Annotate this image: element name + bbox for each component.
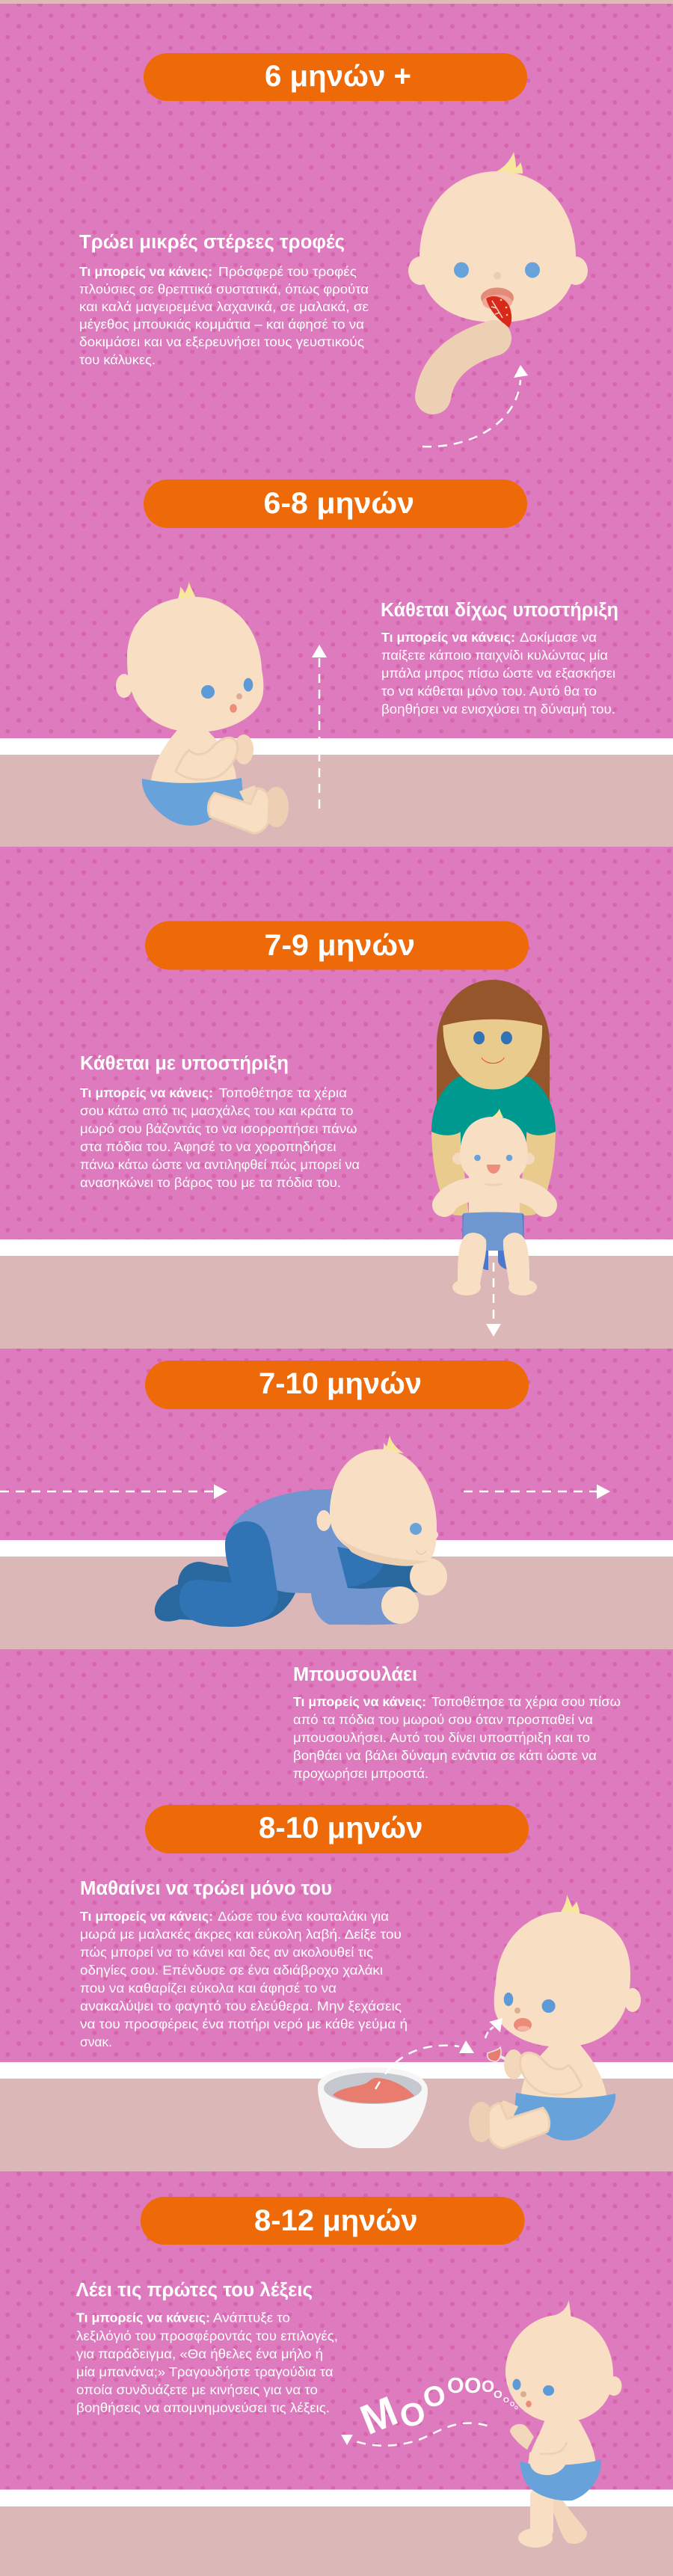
text block: advice for sitting with support: ανασηκώνει το βάρος του με τα πόδια του. — [80, 1175, 341, 1190]
text block: advice for self feeding: οδηγίες σου. Επένδυσε σε ένα αδιάβροχο χαλάκι — [80, 1963, 383, 1978]
age pill: 7-10 months: 7-10 μηνών — [259, 1367, 422, 1400]
text block: advice for sitting with support — [80, 1085, 360, 1190]
text block: advice for sitting with support: σου κάτω από τις μασχάλες του και κράτα το — [80, 1103, 353, 1118]
heading: sits with support: Κάθεται με υποστήριξη — [80, 1053, 289, 1074]
arrow: dashed arrow right ahead of baby — [464, 1484, 610, 1499]
text block: advice for first words: μία μπανάνα;» Τραγουδήστε τραγούδια τα — [76, 2364, 334, 2379]
floor — [0, 2489, 673, 2576]
text block: advice for sitting without support: παίξετε κάποιο παιχνίδι κυλώντας μία — [381, 648, 608, 663]
text block: advice for crawling — [293, 1694, 621, 1781]
arrow: dashed arrow down — [486, 1263, 501, 1337]
text block: advice for self feeding: πώς μπορεί να το κάνει και δες αν ακολουθεί τις — [80, 1945, 373, 1960]
illustration: crawling baby — [155, 1435, 447, 1627]
age pill: 7-9 months — [145, 921, 529, 969]
illustration: bowl of food — [318, 2067, 428, 2148]
illustration: mother holding baby — [431, 980, 556, 1295]
text block: advice for sitting without support: Δοκίμασε να — [520, 630, 597, 645]
text block: advice for solid foods: και καλά μαγειρεμένα λαχανικά, σε μαλακά, σε — [79, 299, 369, 314]
heading: crawls: Μπουσουλάει — [293, 1664, 417, 1685]
text block: advice for first words — [76, 2310, 338, 2415]
arrow: dashed arrow right behind baby — [0, 1484, 227, 1499]
text block: advice for solid foods: μέγεθος μπουκιάς κομμάτια – και άφησέ το να — [79, 317, 364, 332]
callout: MOOO speech letters: O — [447, 2374, 464, 2398]
panel: 8-12 months — [0, 2197, 673, 2576]
arrow: dashed arrow up — [312, 645, 327, 809]
age pill: 6 months plus: 6 μηνών + — [265, 60, 411, 93]
text block: advice for self feeding — [80, 1909, 408, 2049]
text block: advice for self feeding: σνακ. — [80, 2034, 112, 2049]
age pill: 6-8 months — [144, 479, 527, 528]
callout: MOOO speech letters: O — [482, 2377, 494, 2396]
age pill: 8-12 months: 8-12 μηνών — [254, 2204, 417, 2237]
floor — [0, 1239, 673, 1349]
heading: learns to feed himself: Μαθαίνει να τρώει μόνο του — [80, 1878, 332, 1899]
callout: MOOO speech letters — [354, 2374, 518, 2444]
illustration: baby eating strawberry — [408, 152, 588, 396]
illustration: baby with spoon — [469, 1895, 641, 2148]
text block: advice for first words: Ανάπτυξε το — [213, 2310, 290, 2325]
panel: 6 months plus — [79, 53, 588, 447]
age pill: 8-12 months — [141, 2197, 525, 2245]
callout: MOOO speech letters: O — [510, 2401, 514, 2408]
text block: advice for first words: βοηθήσεις να απομνημονεύσει τις λέξεις. — [76, 2400, 330, 2415]
text block: advice for solid foods: πλούσιες σε θρεπτικά συστατικά, όπως φρούτα — [79, 281, 369, 296]
text block: advice for sitting without support: βοηθήσει να ενισχύσει τη δύναμή του. — [381, 702, 615, 717]
text block: advice for sitting with support: Τι μπορείς να κάνεις: — [80, 1085, 213, 1100]
text block: advice for self feeding: ανακαλύψει το φαγητό του ελεύθερα. Μην ξεχάσεις — [80, 1999, 402, 2014]
callout: MOOO speech letters: O — [503, 2396, 509, 2405]
text block: advice for sitting with support: μωρό σου βάζοντάς το να ισορροπήσει πάνω — [80, 1121, 357, 1136]
callout: MOOO speech letters: O — [396, 2394, 429, 2435]
age pill: 8-10 months — [145, 1805, 529, 1853]
text block: advice for crawling: Τι μπορείς να κάνεις: — [293, 1694, 426, 1709]
text block: advice for crawling: από τα πόδια του μωρού σου όταν προσπαθεί να — [293, 1712, 593, 1727]
text block: advice for self feeding: να του προσφέρεις ένα ποτήρι νερό με κάθε γεύμα ή — [80, 2017, 408, 2031]
callout: MOOO speech letters: O — [494, 2388, 503, 2401]
age pill: 8-10 months: 8-10 μηνών — [259, 1812, 423, 1844]
text block: advice for sitting with support: Τοποθέτησε τα χέρια — [219, 1085, 347, 1100]
text block: advice for solid foods: Τι μπορείς να κάνεις: — [79, 264, 212, 279]
panel: 7-10 months — [0, 1361, 673, 1781]
callout: MOOO speech letters: O — [420, 2379, 449, 2415]
text block: advice for crawling: μπουσουλήσει. Αυτό του δίνει υποστήριξη και το — [293, 1730, 590, 1745]
text block: advice for solid foods — [79, 264, 369, 367]
text block: advice for first words: Τι μπορείς να κάνεις: — [76, 2310, 210, 2325]
text block: advice for self feeding: που να καθαρίζει εύκολα και άφησέ το να — [80, 1981, 336, 1996]
floor — [0, 2062, 673, 2171]
arrow: dashed arc from spoon to mouth — [485, 2018, 503, 2038]
text block: advice for sitting without support: Τι μπορείς να κάνεις: — [381, 630, 515, 645]
text block: advice for first words: λεξιλόγιό του προσφέροντάς του επιλογές, — [76, 2328, 338, 2343]
arrow: curved dashed arrow up — [422, 365, 528, 447]
age pill: 6 months plus — [144, 53, 527, 101]
text block: advice for sitting without support: μπάλα μπρος πίσω ώστε να εξασκήσει — [381, 666, 615, 681]
text block: advice for self feeding: μωρά με μαλακές άκρες και εύκολη λαβή. Δείξε του — [80, 1927, 402, 1942]
age pill: 6-8 months: 6-8 μηνών — [263, 487, 414, 520]
text block: advice for self feeding: Τι μπορείς να κάνεις: — [80, 1909, 213, 1924]
arrow: dashed curve to the left — [341, 2423, 488, 2446]
text block: advice for solid foods: του κάλυκες. — [79, 352, 156, 367]
heading: eats small solid foods: Τρώει μικρές στέρεες τροφές — [79, 232, 345, 253]
text block: advice for sitting with support: πάνω κάτω ώστε να αντιληφθεί πώς μπορεί να — [80, 1157, 360, 1172]
text block: advice for crawling: Τοποθέτησε τα χέρια σου πίσω — [431, 1694, 621, 1709]
illustration: baby sitting — [116, 582, 289, 833]
callout: MOOO speech letters: M — [354, 2387, 404, 2444]
heading: says first words: Λέει τις πρώτες του λέξεις — [76, 2280, 313, 2301]
age pill: 7-9 months: 7-9 μηνών — [265, 929, 415, 962]
panel: 6-8 months — [0, 479, 673, 847]
callout: MOOO speech letters: O — [514, 2406, 518, 2411]
text block: advice for first words: για παράδειγμα, «Θα ήθελες ένα μήλο ή — [76, 2346, 323, 2361]
text block: advice for crawling: βοηθάει να βάλει δύναμη ενάντια σε κάτι ώστε να — [293, 1748, 597, 1763]
text block: advice for crawling: προχωρήσει μπροστά. — [293, 1766, 428, 1781]
illustration: standing baby talking — [505, 2300, 622, 2548]
text block: advice for solid foods: Πρόσφερέ του τροφές — [218, 264, 357, 279]
text block: advice for self feeding: Δώσε του ένα κουταλάκι για — [218, 1909, 389, 1924]
callout: MOOO speech letters: O — [464, 2374, 482, 2398]
text block: advice for sitting without support: το να κάθεται μόνο του. Αυτό θα το — [381, 684, 597, 699]
panel: 7-9 months — [0, 921, 673, 1349]
text block: advice for first words: οποία συνδυάζετε με κινήσεις για να το — [76, 2382, 318, 2397]
arrow: dashed arc from bowl to spoon — [375, 2040, 474, 2089]
floor — [0, 738, 673, 847]
heading: sits without support: Κάθεται δίχως υποστήριξη — [381, 600, 618, 621]
text block: advice for solid foods: δοκιμάσει και να εξερευνήσει τους γευστικούς — [79, 334, 364, 349]
text block: advice for sitting with support: στα πόδια του. Άφησέ το να χοροπηδήσει — [80, 1139, 336, 1154]
panel: 8-10 months — [0, 1805, 673, 2171]
age pill: 7-10 months — [145, 1361, 529, 1409]
text block: advice for sitting without support — [381, 630, 615, 717]
floor — [0, 1540, 673, 1649]
